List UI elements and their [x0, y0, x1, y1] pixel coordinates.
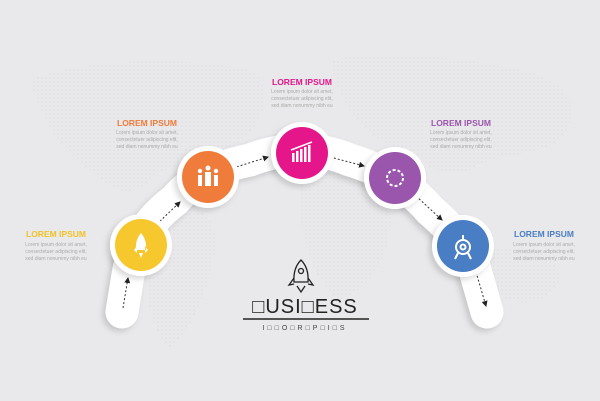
- icon: center rocket: [289, 260, 313, 292]
- step 2 circle orange: [177, 146, 239, 208]
- world map background: [30, 55, 572, 350]
- step 4 circle purple: [364, 147, 426, 209]
- title: business: □USI□ESS: [252, 296, 358, 318]
- icon: chart: [291, 142, 312, 162]
- text: step 4: Lorem ipsum dolor sit amet,: [430, 130, 492, 136]
- text: step 2: LOREM IPSUM: [117, 118, 177, 128]
- text: step 5: consectetuer adipiscing elit,: [513, 249, 575, 255]
- text: step 2: [116, 118, 178, 150]
- text: step 1: Lorem ipsum dolor sit amet,: [25, 242, 87, 248]
- text: step 3: consectetuer adipiscing elit,: [271, 96, 333, 102]
- arrows: [123, 157, 486, 308]
- step 5 circle blue: [432, 215, 494, 277]
- text: step 3: LOREM IPSUM: [272, 77, 332, 87]
- text: step 1: sed diam nonummy nibh eu: [25, 256, 87, 262]
- text: step 2: consectetuer adipiscing elit,: [116, 137, 178, 143]
- text: step 4: [430, 118, 492, 150]
- icon: rocket: [134, 233, 148, 258]
- text: step 5: sed diam nonummy nibh eu: [513, 256, 575, 262]
- text: step 1: LOREM IPSUM: [26, 229, 86, 239]
- text: step 4: sed diam nonummy nibh eu: [430, 144, 492, 150]
- title: business: I□□O□R□P□I□S: [262, 325, 348, 332]
- road path: [122, 150, 487, 312]
- text: step 5: LOREM IPSUM: [514, 229, 574, 239]
- text: step 2: sed diam nonummy nibh eu: [116, 144, 178, 150]
- icon: people: [198, 166, 218, 186]
- text: step 2: Lorem ipsum dolor sit amet,: [116, 130, 178, 136]
- text: step 4: LOREM IPSUM: [431, 118, 491, 128]
- step 3 circle magenta: [271, 122, 333, 184]
- text: step 4: consectetuer adipiscing elit,: [430, 137, 492, 143]
- icon: target: [455, 235, 471, 259]
- text: step 3: [271, 77, 333, 109]
- step 1 circle yellow: [110, 214, 172, 276]
- text: step 3: sed diam nonummy nibh eu: [271, 103, 333, 109]
- title: business: [243, 296, 369, 332]
- icon: gear: [387, 170, 403, 186]
- text: step 5: [513, 229, 575, 262]
- text: step 3: Lorem ipsum dolor sit amet,: [271, 89, 333, 95]
- text: step 1: consectetuer adipiscing elit,: [25, 249, 87, 255]
- text: step 5: Lorem ipsum dolor sit amet,: [513, 242, 575, 248]
- text: step 1: [25, 229, 87, 262]
